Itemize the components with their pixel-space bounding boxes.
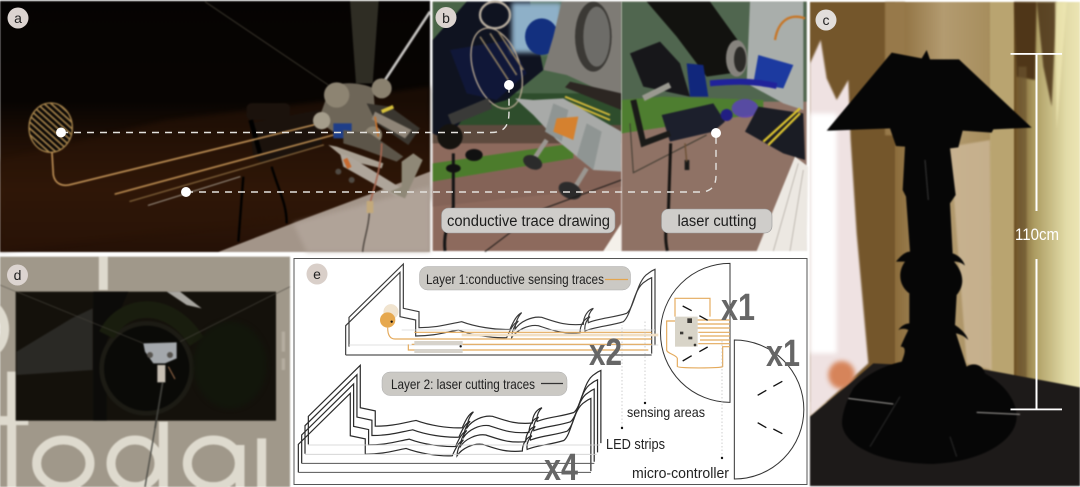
label: laser cutting: laser cutting [678, 213, 756, 230]
annotation leaders [621, 320, 723, 459]
circular piece with cut slots [734, 340, 804, 479]
legend: layer 1 [420, 266, 630, 290]
multiplier: x2: x2 [589, 332, 622, 374]
dimension marker: 110cm: 110cm [1015, 225, 1059, 244]
panel a: night photo of robot drawing traces [0, 1, 430, 252]
layer 2 traces [298, 365, 601, 472]
legend: layer 1: Layer 1:conductive sensing traces [426, 271, 604, 287]
label: conductive trace drawing: conductive trace drawing [447, 213, 610, 230]
robot [143, 342, 177, 487]
label: laser cutting [662, 209, 772, 233]
panel c: lamp photo [810, 2, 1080, 486]
panel b: right photo, laser cutting [622, 2, 808, 251]
syringe [515, 98, 621, 172]
multiplier: x1 upper: x1 [721, 287, 755, 329]
lamp silhouette [827, 50, 1032, 464]
legend: layer 2 [382, 372, 567, 396]
badge a: a [14, 10, 22, 26]
badge b: b [442, 10, 450, 26]
badge a [8, 8, 28, 28]
panel d: robot on wall with chalk letters [0, 257, 290, 487]
robot body [313, 78, 423, 252]
badge b [436, 7, 456, 28]
circular piece with electronics [660, 263, 730, 402]
label: conductive trace drawing [442, 208, 615, 233]
badge d [7, 264, 28, 286]
panel e frame [294, 258, 807, 484]
multiplier: x1 lower: x1 [766, 333, 800, 375]
annotation: sensing areas: sensing areas [627, 404, 705, 420]
badge c [816, 10, 836, 30]
annotation: LED strips: LED strips [606, 437, 665, 453]
layer 1 traces [346, 264, 658, 355]
dashed connectors with anchor dots [56, 80, 721, 197]
legend: layer 2: Layer 2: laser cutting traces [391, 376, 535, 392]
badge d: d [14, 267, 21, 283]
left bright curtain [810, 40, 868, 417]
annotation: micro-controller: micro-controller [632, 466, 729, 482]
badge e [306, 264, 328, 284]
badge c: c [822, 12, 830, 28]
panel b: left photo, conductive trace drawing [433, 2, 621, 252]
badge e: e [313, 266, 321, 282]
